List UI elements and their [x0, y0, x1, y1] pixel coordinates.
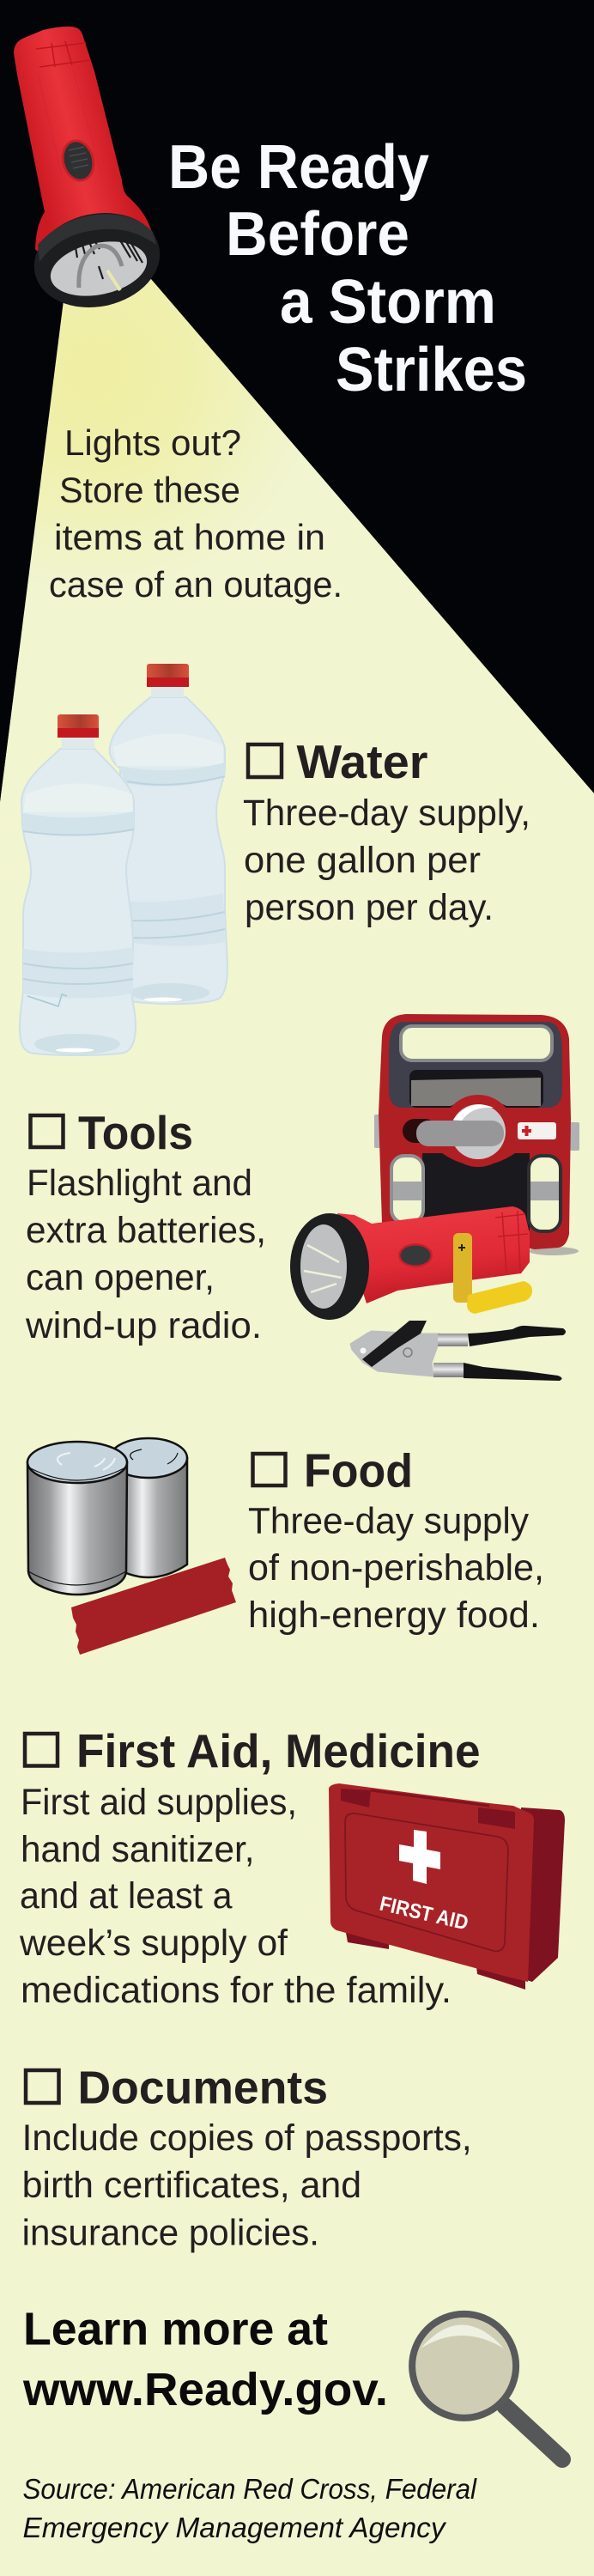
text: tools details: can opener, [26, 1257, 215, 1298]
checkbox [25, 1734, 58, 1765]
source note: Emergency Management Agency [22, 2512, 447, 2543]
text: food details: of non-perishable, [248, 1547, 544, 1589]
text: water details: person per day. [245, 887, 494, 928]
icon: wind-up radio [374, 1014, 579, 1255]
heading: food: Food [304, 1444, 413, 1498]
back bottle [110, 664, 227, 1004]
text: first aid details: medications for the family. [21, 1970, 452, 2011]
text: documents details: birth certificates, and [22, 2165, 361, 2206]
text: documents details: Include copies of passports, [22, 2117, 472, 2159]
section: documents [22, 2063, 472, 2253]
text: documents details: insurance policies. [22, 2212, 319, 2253]
title: a Storm [280, 268, 496, 337]
black night background [0, 0, 594, 803]
text: food details: Three-day supply [248, 1501, 529, 1542]
icon: food bar [71, 1558, 236, 1655]
text: first aid details: and at least a [20, 1875, 233, 1917]
text: first aid details [19, 1782, 452, 2011]
kit label: FIRST AID [378, 1893, 470, 1935]
source note [22, 2473, 478, 2543]
text: water details [243, 793, 530, 928]
icon: water bottles [20, 664, 227, 1055]
text: first aid details: First aid supplies, [21, 1782, 297, 1823]
text: food details [248, 1501, 544, 1636]
title: Strikes [336, 336, 527, 404]
text: tools details: wind-up radio. [25, 1305, 262, 1346]
heading: tools: Tools [78, 1106, 193, 1159]
call to action: www.Ready.gov. [22, 2364, 388, 2415]
icon: hero flashlight [14, 27, 169, 319]
section: water [243, 735, 530, 928]
title: Be Ready [168, 133, 429, 202]
heading: water: Water [297, 735, 427, 788]
checkbox [26, 2070, 58, 2103]
back can [110, 1438, 187, 1577]
title [168, 133, 527, 404]
intro text: Store these [59, 470, 240, 510]
text: documents details [22, 2117, 472, 2253]
call to action [22, 2303, 388, 2415]
source note: Source: American Red Cross, Federal [22, 2473, 478, 2505]
front can [27, 1442, 127, 1595]
call to action: Learn more at [23, 2303, 328, 2354]
text: tools details: extra batteries, [26, 1210, 266, 1251]
title: Before [226, 200, 409, 269]
intro text [49, 422, 342, 605]
section: tools [25, 1106, 266, 1346]
intro text: items at home in [54, 517, 325, 557]
flashlight beam glow [0, 279, 594, 859]
text: food details: high-energy food. [248, 1595, 540, 1636]
heading: documents: Documents [77, 2063, 328, 2114]
text: water details: Three-day supply, [243, 793, 530, 834]
icon: tools flashlight [290, 1206, 530, 1320]
text: tools details: Flashlight and [27, 1163, 252, 1204]
heading: first aid, medicine: First Aid, Medicine [76, 1724, 481, 1777]
text: water details: one gallon per [244, 840, 481, 881]
icon: magnifying glass [412, 2314, 562, 2459]
intro text: Lights out? [64, 422, 241, 463]
text: tools details [25, 1163, 266, 1346]
text: first aid details: week’s supply of [19, 1923, 288, 1964]
checkbox [252, 1454, 285, 1485]
checkbox [248, 744, 282, 777]
checkbox [31, 1115, 64, 1147]
intro text: case of an outage. [49, 564, 342, 605]
icon: batteries [453, 1233, 532, 1314]
section: food [248, 1444, 544, 1636]
text: first aid details: hand sanitizer, [21, 1829, 254, 1870]
section: first aid [19, 1724, 481, 2011]
front bottle [20, 714, 136, 1055]
icon: first aid kit [329, 1783, 565, 1990]
icon: can opener [350, 1321, 566, 1381]
icon: food cans [27, 1438, 187, 1595]
